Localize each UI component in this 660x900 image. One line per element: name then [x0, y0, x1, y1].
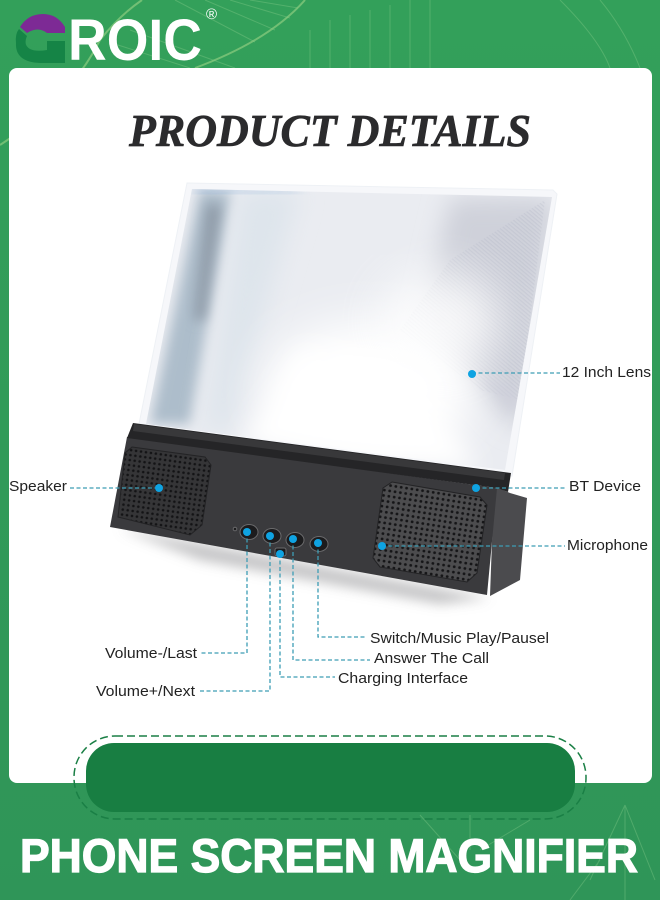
callout: Volume+/Next: [96, 532, 274, 700]
callout: Charging Interface: [276, 550, 468, 687]
callout: Volume-/Last: Volume-/Last: [105, 645, 198, 662]
control buttons: [233, 524, 328, 556]
speaker grille: right: [373, 482, 487, 582]
lens: [130, 180, 570, 480]
panel: white card: [9, 68, 652, 783]
title: PRODUCT DETAILS: [128, 105, 531, 156]
bottom title: PHONE SCREEN MAGNIFIER: [20, 829, 638, 882]
callout: Microphone: [378, 537, 648, 554]
callout: Microphone: Microphone: [567, 537, 648, 554]
callout: Volume-/Last: [105, 528, 251, 662]
callout: Speaker: Speaker: [9, 478, 67, 495]
base lid: [127, 423, 511, 492]
callout: Answer The Call: Answer The Call: [374, 650, 489, 667]
callout: Speaker: [9, 478, 163, 495]
callout: Charging Interface: Charging Interface: [338, 670, 468, 687]
logo: [16, 6, 217, 73]
logo wordmark: ROIC: [68, 8, 202, 73]
callout: 12 Inch Lens: 12 Inch Lens: [562, 364, 651, 381]
base side: [490, 486, 527, 596]
speaker grille: left: [118, 447, 211, 535]
callout: Answer The Call: [289, 535, 489, 667]
dashed pill outline: [74, 736, 586, 819]
callout: BT Device: BT Device: [569, 478, 641, 495]
registered mark: ®: [206, 6, 217, 23]
base front: [110, 437, 497, 595]
icon: logo G: [16, 14, 65, 63]
callout: BT Device: [472, 478, 641, 495]
callout: 12 Inch Lens: [468, 364, 651, 381]
callout: Volume+/Next: Volume+/Next: [96, 683, 196, 700]
shadow under base: [118, 528, 490, 604]
callout: Switch/Music Play/Pausel: Switch/Music Play/Pausel: [370, 630, 549, 647]
callout: Switch/Music Play/Pausel: [314, 539, 549, 647]
pill banner: [86, 743, 575, 812]
product: magnifier: [110, 180, 570, 604]
